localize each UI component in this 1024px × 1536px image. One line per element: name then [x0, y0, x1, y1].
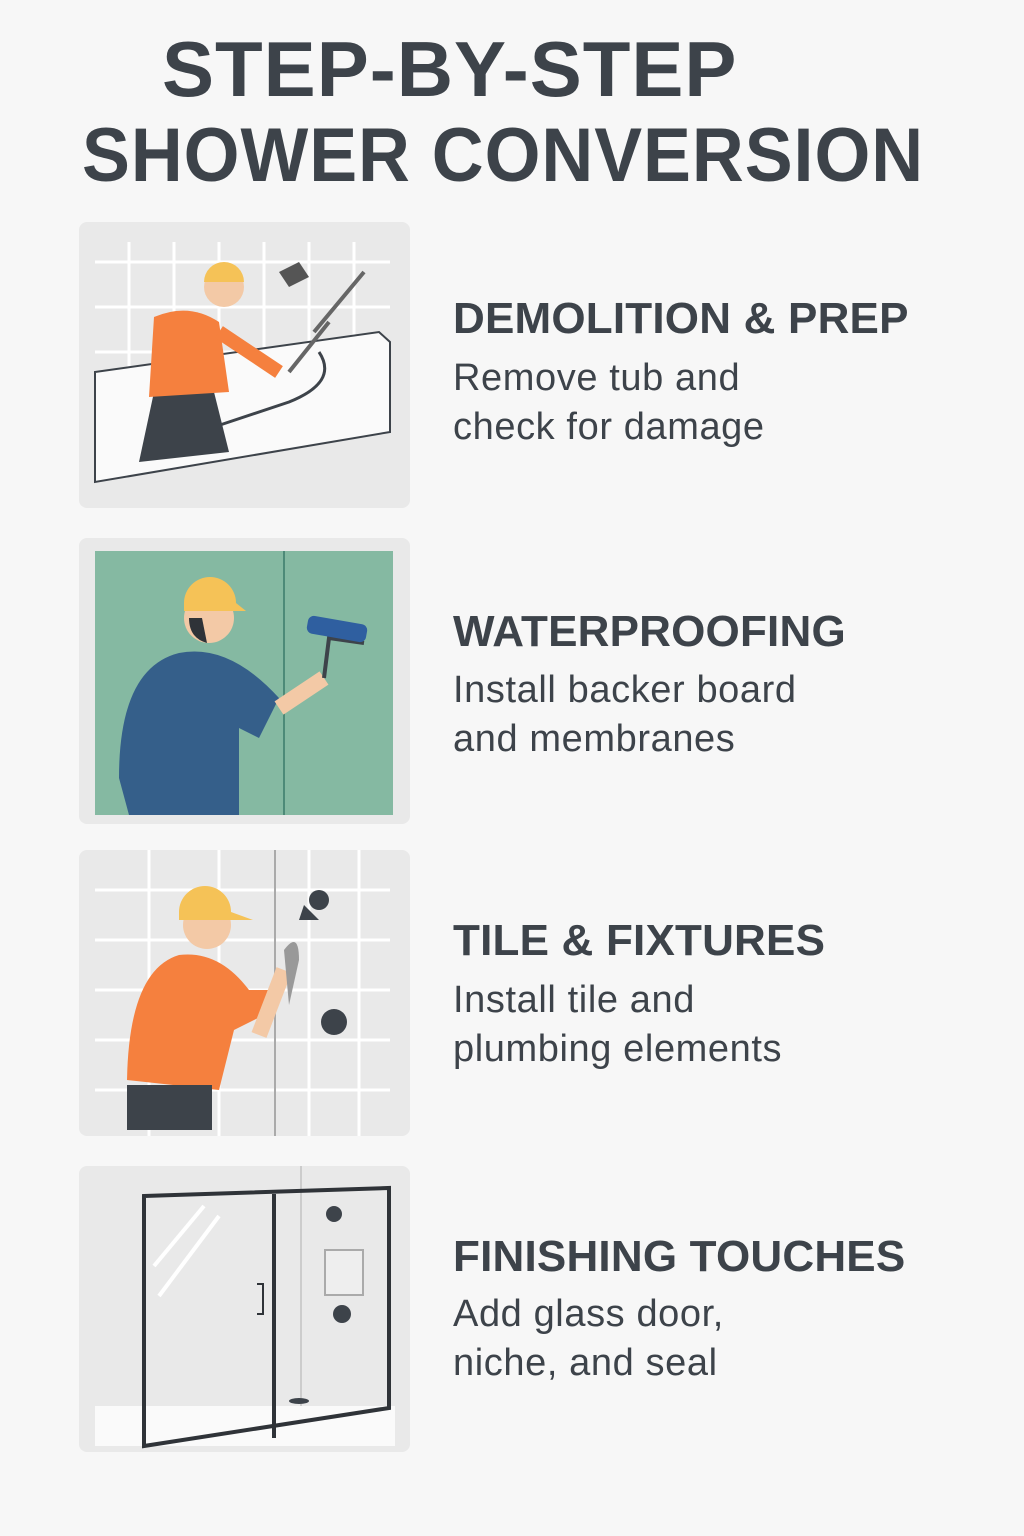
title: SHOWER CONVERSION: [82, 113, 924, 198]
panel: tile illustration: [79, 850, 410, 1136]
heading: demolition: DEMOLITION & PREP: [453, 294, 909, 343]
text: demolition: [453, 357, 765, 448]
heading: tile: TILE & FIXTURES: [453, 916, 825, 965]
panel: finishing illustration: [79, 1166, 410, 1452]
heading: waterproofing: WATERPROOFING: [453, 607, 846, 656]
worker: [139, 392, 229, 462]
title: [82, 25, 924, 198]
text: tile: [453, 979, 782, 1070]
text: demolition: check for damage: [453, 406, 765, 448]
text: waterproofing: and membranes: [453, 718, 735, 760]
text: tile: Install tile and: [453, 979, 695, 1021]
text: finishing: [453, 1293, 724, 1384]
text: tile: plumbing elements: [453, 1028, 782, 1070]
panel: waterproofing illustration: [79, 538, 410, 824]
text: demolition: Remove tub and: [453, 357, 740, 399]
text: finishing: niche, and seal: [453, 1342, 718, 1384]
heading: finishing: FINISHING TOUCHES: [453, 1232, 905, 1281]
title: STEP-BY-STEP: [162, 25, 737, 113]
text: finishing: Add glass door,: [453, 1293, 724, 1335]
panel: demolition illustration: [79, 222, 410, 508]
text: waterproofing: [453, 669, 797, 760]
text: waterproofing: Install backer board: [453, 669, 797, 711]
